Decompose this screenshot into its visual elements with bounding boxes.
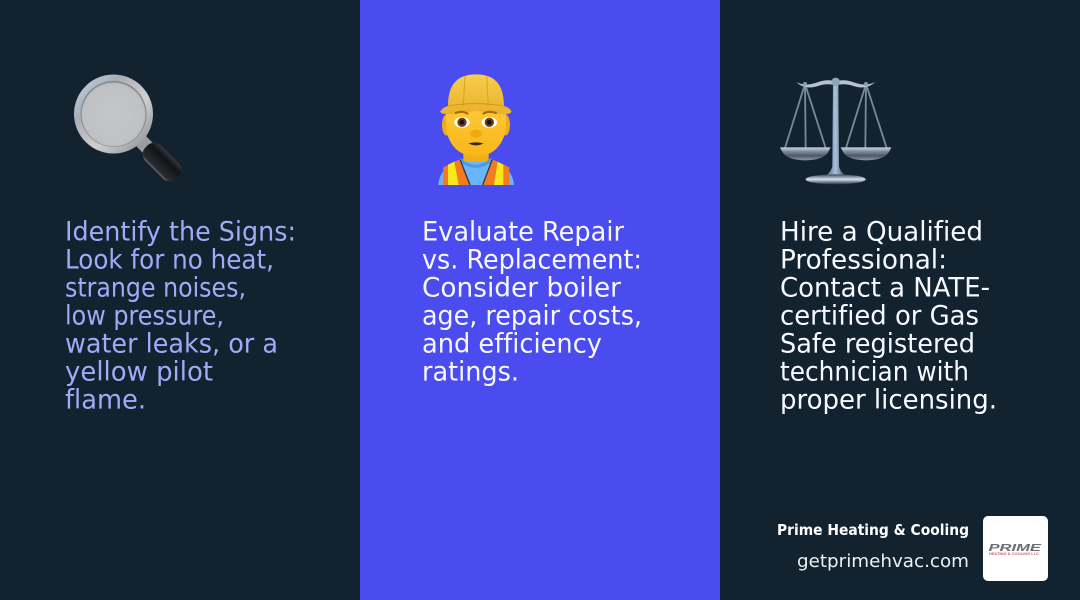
text: hire a qualified professional: technician with — [780, 356, 969, 388]
text: identify the signs — [65, 216, 296, 416]
icon: magnifying glass — [74, 74, 185, 185]
text: hire a qualified professional: certified or Gas — [780, 300, 979, 332]
text: identify the signs: yellow pilot — [65, 356, 213, 388]
text: identify the signs: Identify the Signs: — [65, 216, 296, 248]
text: hire a qualified professional — [780, 216, 997, 416]
text: hire a qualified professional: Hire a Qualified — [780, 216, 983, 248]
text: identify the signs: flame. — [65, 384, 146, 416]
branding: company name and website: Prime Heating & Cooling — [777, 521, 969, 539]
text: hire a qualified professional: Contact a NATE- — [780, 272, 990, 304]
panel: identify the signs — [0, 0, 360, 600]
text: evaluate repair vs replacement: age, repair costs, — [422, 300, 642, 332]
text: hire a qualified professional: Professional: — [780, 244, 947, 276]
text: evaluate repair vs replacement: and efficiency — [422, 328, 602, 360]
branding: company name and website: getprimehvac.com — [797, 551, 969, 572]
text: evaluate repair vs replacement: Consider boiler — [422, 272, 622, 304]
panel: evaluate repair vs replacement — [360, 0, 720, 600]
branding: company name and website — [777, 521, 969, 572]
text: evaluate repair vs replacement: vs. Replacement: — [422, 244, 642, 276]
icon: balance scale — [780, 78, 891, 184]
text: evaluate repair vs replacement — [422, 216, 642, 388]
panel: hire a qualified professional — [720, 0, 1080, 600]
icon: construction worker — [438, 74, 514, 185]
logo: prime heating and cooling — [983, 516, 1048, 581]
text: identify the signs: Look for no heat, — [65, 244, 274, 276]
logo: prime heating and cooling: HEATING & COOLING LLC — [989, 551, 1039, 556]
text: hire a qualified professional: proper licensing. — [780, 384, 997, 416]
text: identify the signs: low pressure, — [65, 300, 224, 332]
logo: prime heating and cooling: PRIME — [988, 542, 1043, 554]
text: identify the signs: strange noises, — [65, 272, 246, 304]
text: hire a qualified professional: Safe registered — [780, 328, 975, 360]
text: identify the signs: water leaks, or a — [65, 328, 278, 360]
text: evaluate repair vs replacement: Evaluate Repair — [422, 216, 625, 248]
text: evaluate repair vs replacement: ratings. — [422, 356, 519, 388]
